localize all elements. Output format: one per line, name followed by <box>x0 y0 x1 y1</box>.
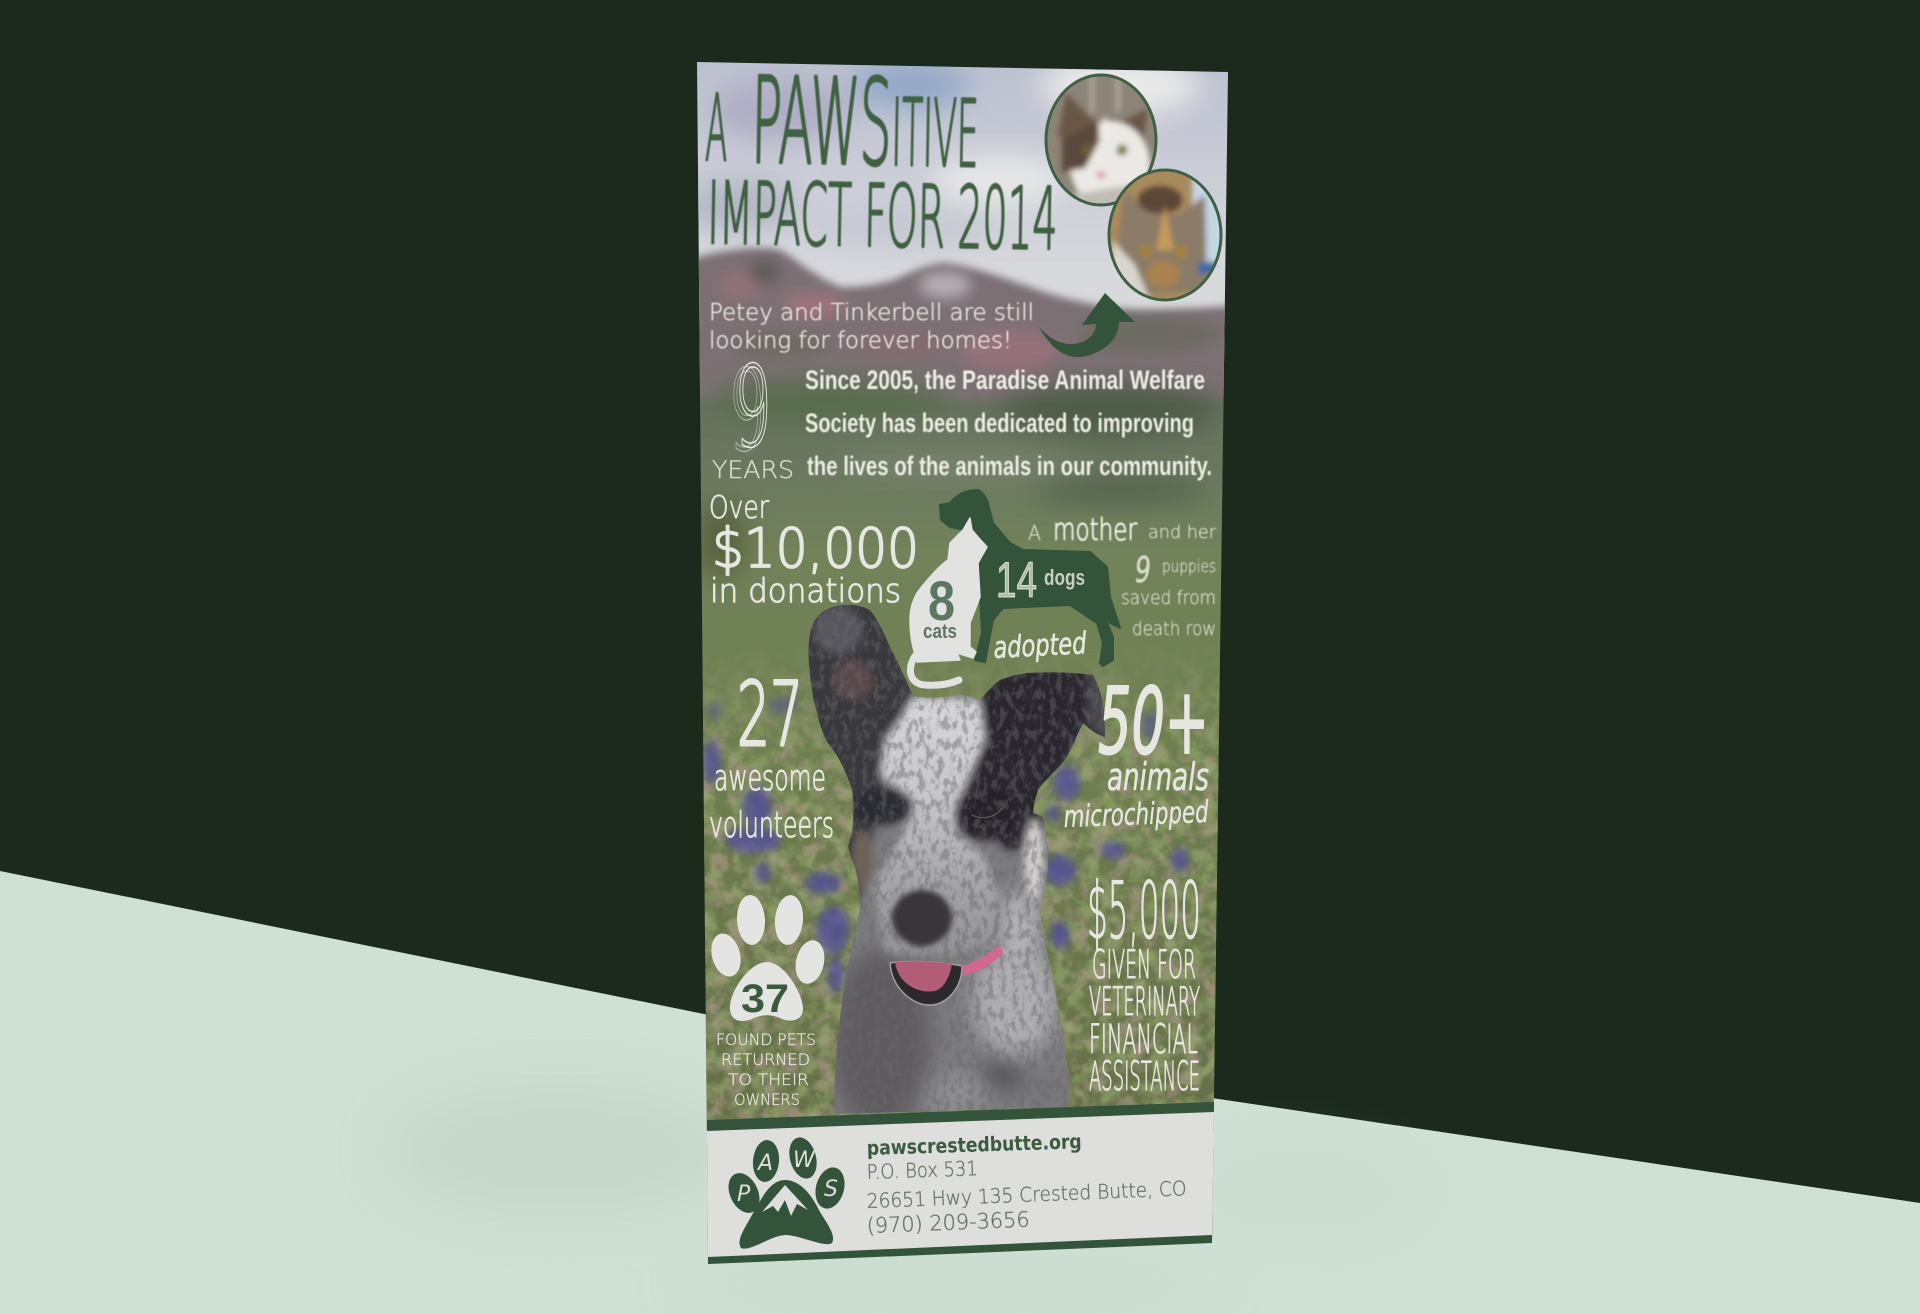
PAWS logo: W <box>793 1148 816 1173</box>
stat: over $10,000 in donations <box>709 490 919 610</box>
title: ITIVE <box>891 79 979 189</box>
title: PAWS <box>750 53 893 193</box>
stat: over $10,000 in donations: $10,000 <box>712 517 919 580</box>
caption: Petey and Tinkerbell <box>709 300 1034 354</box>
stat: over $10,000 in donations: Over <box>709 490 769 526</box>
PAWS logo <box>722 1134 849 1249</box>
stat: $5,000 veterinary assistance: FINANCIAL <box>1089 1017 1198 1063</box>
light floor <box>0 871 1920 1314</box>
flyer card: VETERINARY <box>1089 980 1200 1025</box>
cat photo: Petey <box>1044 74 1158 206</box>
PAWS logo: S <box>824 1177 838 1202</box>
footer band and white contact panel <box>707 1102 1214 1264</box>
photo: spotted dog <box>808 604 1105 1114</box>
title: A <box>705 75 728 182</box>
intro text <box>805 365 1212 481</box>
stat: 27 awesome volunteers: awesome <box>714 758 826 799</box>
stat: 27 awesome volunteers: 27 <box>737 663 803 766</box>
contact details: P.O. Box 531 <box>866 1156 978 1184</box>
card shadow on floor <box>390 1090 1420 1299</box>
cat silhouette: 8 cats <box>910 518 987 685</box>
note: mother and 9 puppies <box>1028 513 1217 640</box>
stat: 27 awesome volunteers: volunteers <box>709 805 834 846</box>
caption: Petey and Tinkerbell: Petey and Tinkerbell are still <box>709 300 1034 326</box>
flyer card: ASSISTANCE <box>1089 1054 1200 1100</box>
cat photo: Tinkerbell <box>1105 165 1225 305</box>
intro text: Society has been dedicated to improving <box>805 408 1194 438</box>
note: mother and 9 puppies: 9 <box>1135 550 1151 591</box>
stat: $5,000 veterinary assistance <box>1087 867 1201 1100</box>
note: mother and 9 puppies: puppies <box>1162 557 1216 577</box>
flyer card <box>680 53 1235 1264</box>
stat: 50+ animals microchipped: animals <box>1107 755 1209 799</box>
photo background: sky, mountains and meadow <box>680 55 1235 1130</box>
stat: 37 found pets paw: TO THEIR <box>728 1070 809 1089</box>
note: mother and 9 puppies: death row <box>1132 618 1216 640</box>
dog silhouette: 14 dogs: dogs <box>1044 565 1085 590</box>
stat: 50+ animals microchipped: 50+ <box>1098 668 1209 775</box>
note: mother and 9 puppies: A <box>1028 521 1041 545</box>
flyer card: $5,000 <box>1087 867 1201 957</box>
stat: 27 awesome volunteers <box>709 663 834 846</box>
stat: 37 found pets paw: OWNERS <box>734 1090 800 1109</box>
intro text: Since 2005, the Paradise Animal Welfare <box>805 365 1205 395</box>
stat: 9 years: 9 <box>728 347 766 477</box>
PAWS logo: A <box>756 1151 773 1176</box>
stat: 37 found pets paw: 37 <box>741 977 789 1021</box>
note: mother and 9 puppies: and her <box>1148 522 1217 543</box>
dog silhouette: 14 dogs <box>940 490 1120 666</box>
stat: 50+ animals microchipped: microchipped <box>1063 795 1210 835</box>
stat: 9 years: 9 <box>734 343 772 473</box>
arrow pointing at cats <box>1039 293 1135 357</box>
caption: Petey and Tinkerbell: looking for forever homes! <box>709 328 1012 354</box>
stat: over $10,000 in donations: in donations <box>710 571 901 610</box>
flyer card: IMPACT FOR 2014 <box>707 164 1058 270</box>
contact details: (970) 209-3656 <box>866 1207 1030 1238</box>
stat: $5,000 veterinary assistance: GIVEN FOR <box>1092 943 1196 988</box>
cat silhouette: 8 cats: cats <box>923 621 957 643</box>
stat: 37 found pets paw: RETURNED <box>721 1050 810 1069</box>
stat: 37 found pets paw <box>707 894 828 1109</box>
label: adopted: adopted <box>993 626 1088 666</box>
cat silhouette: 8 cats: 8 <box>928 569 955 632</box>
note: mother and 9 puppies: saved from <box>1121 587 1216 609</box>
PAWS logo: P <box>737 1182 751 1207</box>
stat: 9 years: YEARS <box>712 456 794 484</box>
note: mother and 9 puppies: mother <box>1053 513 1138 548</box>
dog silhouette: 14 dogs: 14 <box>996 552 1037 608</box>
dog face: nose, mouth, collar <box>890 808 1003 1005</box>
intro text: the lives of the animals in our community. <box>807 451 1212 481</box>
title <box>705 53 1058 270</box>
contact details <box>866 1129 1187 1238</box>
stat: 37 found pets paw: FOUND PETS <box>716 1030 816 1049</box>
stat: 50+ animals microchipped <box>1063 668 1210 835</box>
contact details: 26651 Hwy 135 Crested Butte, CO <box>866 1176 1187 1213</box>
contact details: pawscrestedbutte.org <box>866 1129 1082 1160</box>
